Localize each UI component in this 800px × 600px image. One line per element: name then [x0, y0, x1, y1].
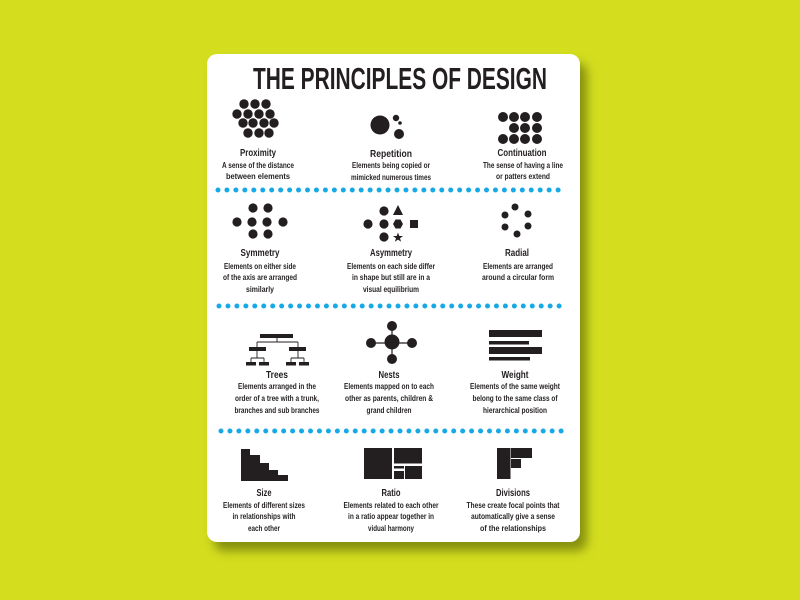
icon: nest network: [366, 321, 417, 364]
panel: radial: Elements are arranged: [483, 262, 553, 271]
title: THE PRINCIPLES OF DESIGN: [253, 61, 547, 96]
panel: repetition: Elements being copied or: [352, 161, 430, 170]
panel: radial: [482, 204, 554, 282]
panel: ratio: vidual harmony: [368, 524, 414, 533]
panel: size: [223, 449, 305, 533]
panel: ratio: Elements related to each other: [344, 501, 438, 510]
panel: radial: around a circular form: [482, 273, 554, 282]
panel: proximity: A sense of the distance: [222, 161, 294, 170]
panel: trees: Elements arranged in the: [238, 382, 316, 391]
panel: repetition: [351, 115, 431, 182]
panel: divisions: automatically give a sense: [471, 512, 555, 521]
panel: nests: Elements mapped on to each: [344, 382, 434, 391]
panel: nests: grand children: [366, 406, 412, 415]
panel: symmetry: similarly: [246, 285, 274, 294]
panel: continuation: [483, 112, 563, 181]
icon: ratio blocks: [364, 448, 422, 479]
panel: divisions: [466, 448, 560, 533]
panel: weight: belong to the same class of: [472, 394, 558, 403]
panel: trees: order of a tree with a trunk,: [235, 394, 319, 403]
icon: radial dots: [502, 204, 532, 238]
panel: asymmetry: visual equilibrium: [363, 285, 419, 294]
panel: weight: Elements of the same weight: [470, 382, 560, 391]
dotted dividers: [218, 190, 570, 431]
icon: repetition circles: [370, 115, 404, 139]
panel: asymmetry: Elements on each side differ: [347, 262, 435, 271]
panel: nests: Nests: [378, 369, 400, 381]
panel: asymmetry: in shape but still are in a: [352, 273, 430, 282]
panel: continuation: or patters extend: [496, 172, 550, 181]
card panel: [207, 54, 580, 542]
panel: weight: Weight: [502, 369, 529, 381]
panel: divisions: of the relationships: [480, 524, 546, 533]
panel: divisions: These create focal points that: [466, 501, 560, 510]
panel: proximity: [222, 99, 294, 181]
panel: proximity: between elements: [226, 172, 291, 181]
panel: ratio: [344, 448, 438, 533]
icon: division blocks: [497, 448, 532, 479]
panel: proximity: Proximity: [240, 147, 276, 159]
icon: weight bars: [489, 330, 542, 360]
panel: ratio: in a ratio appear together in: [348, 512, 434, 521]
panel: asymmetry: [347, 205, 435, 294]
panel: weight: hierarchical position: [483, 406, 547, 415]
panel: radial: Radial: [505, 247, 529, 259]
panel: symmetry: of the axis are arranged: [223, 273, 297, 282]
panel: repetition: mimicked numerous times: [351, 173, 431, 182]
panel: size: in relationships with: [232, 512, 296, 521]
icon: staircase: [241, 449, 288, 481]
icon: proximity dots: [232, 99, 279, 138]
panel: weight: [470, 330, 560, 415]
panel: symmetry: [223, 203, 297, 294]
panel: trees: Trees: [266, 369, 288, 381]
panel: size: Size: [256, 487, 272, 499]
panel: asymmetry: Asymmetry: [370, 247, 412, 259]
panel: ratio: Ratio: [382, 487, 400, 499]
panel: symmetry: Symmetry: [240, 247, 280, 259]
icon: symmetry dots: [232, 203, 288, 239]
panel: repetition: Repetition: [370, 148, 412, 160]
icon: asymmetry shapes: [363, 205, 418, 242]
panel: trees: branches and sub branches: [234, 406, 320, 415]
panel: nests: [344, 321, 434, 415]
panel: continuation: Continuation: [498, 147, 546, 159]
panel: nests: other as parents, children &: [345, 394, 433, 403]
icon: continuation dots: [498, 112, 542, 144]
panel: continuation: The sense of having a line: [483, 161, 563, 170]
panel: trees: [234, 334, 320, 415]
icon: tree diagram: [246, 334, 309, 366]
panel: size: Elements of different sizes: [223, 501, 305, 510]
panel: symmetry: Elements on either side: [224, 262, 296, 271]
panel: size: each other: [248, 524, 280, 533]
panel: divisions: Divisions: [496, 487, 530, 499]
